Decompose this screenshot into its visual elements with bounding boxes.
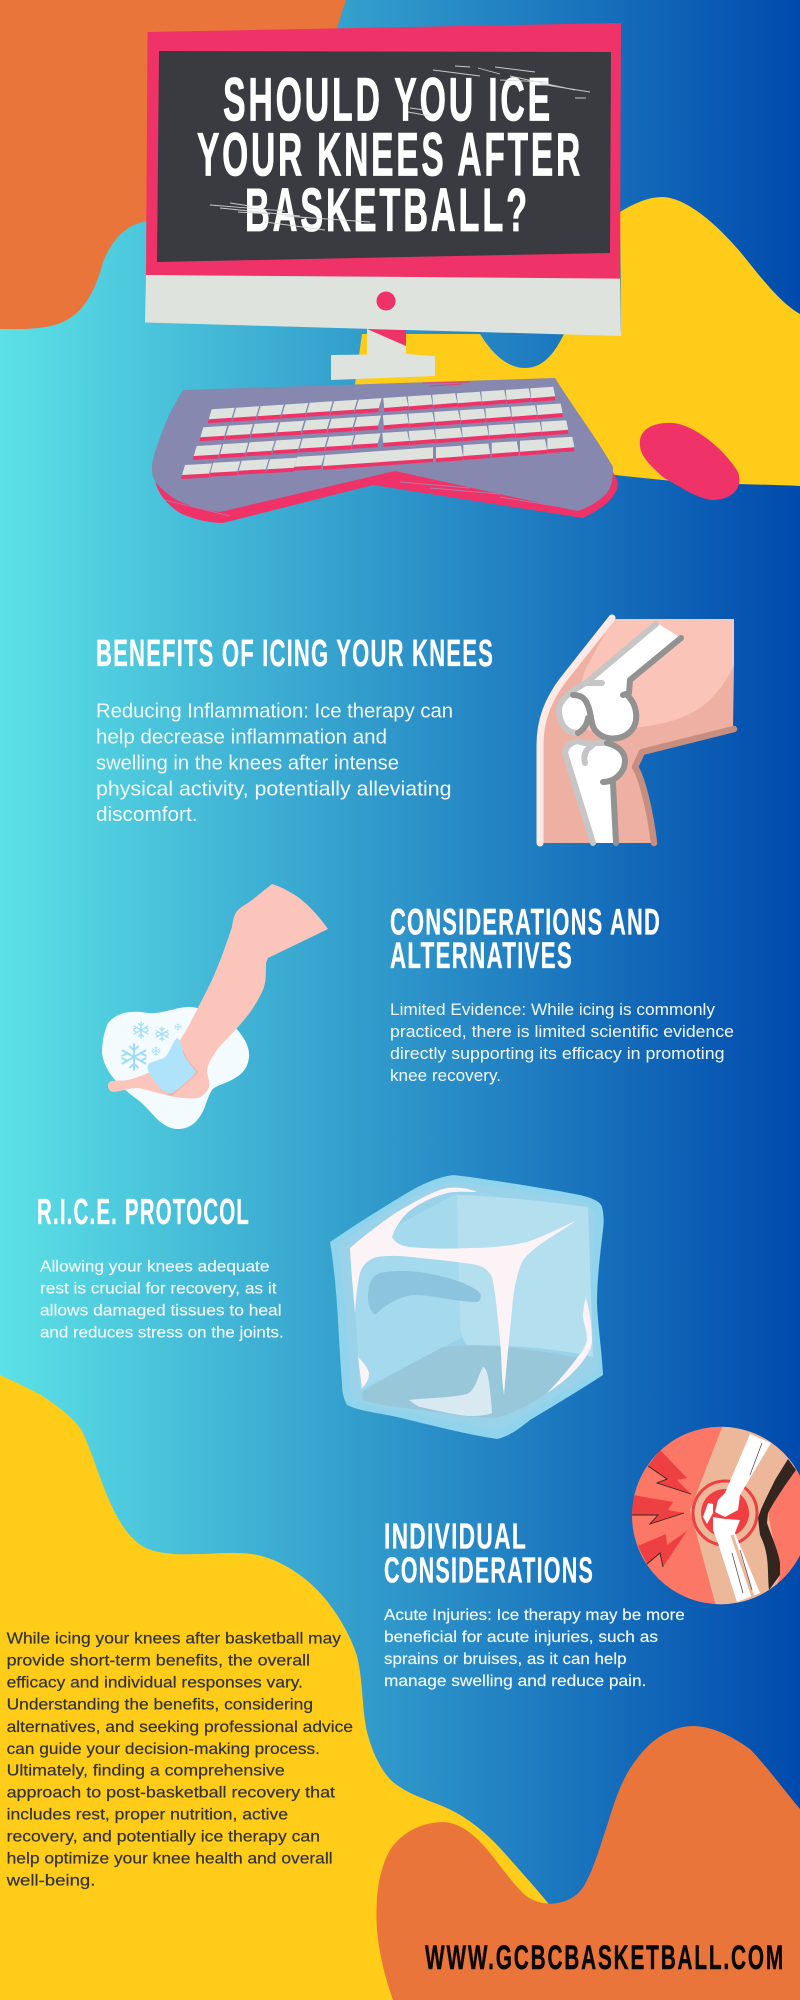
spike outlines (632, 1466, 691, 1567)
blob: yellow lower left (0, 1375, 560, 2000)
keys (181, 387, 574, 479)
conclusion text: approach to post-basketball recovery that (7, 1785, 336, 1802)
title scratches (210, 66, 590, 230)
snow patch (102, 1007, 249, 1129)
body: benefits: swelling in the knees after intense (96, 752, 399, 774)
body: rice: Allowing your knees adequate (40, 1259, 270, 1276)
pain rings (693, 1481, 757, 1545)
body: benefits (96, 700, 453, 826)
conclusion text: includes rest, proper nutrition, active (7, 1807, 288, 1824)
bone detail lines (732, 1443, 762, 1593)
cube outer (330, 1175, 604, 1439)
cube left shade (368, 1271, 481, 1315)
heading: individual: CONSIDERATIONS (384, 1550, 594, 1590)
heading: individual (384, 1516, 594, 1590)
ice pack shadow (160, 1050, 199, 1096)
pain spike bottom (638, 1531, 687, 1567)
section: benefits of icing (96, 633, 494, 826)
tibia (567, 742, 625, 843)
title: SHOULD YOU ICE (223, 66, 553, 134)
blob: pink mouse (640, 423, 739, 500)
monitor frame (146, 23, 621, 279)
heading: rice: R.I.C.E. PROTOCOL (37, 1191, 250, 1232)
skin band (690, 1425, 796, 1606)
femur (559, 623, 681, 738)
pain spike middle (632, 1495, 684, 1524)
body: considerations: Limited Evidence: While icing is commonly (390, 1000, 715, 1019)
section: rice protocol (37, 1191, 284, 1342)
body: considerations: practiced, there is limited scientific evidence (390, 1022, 734, 1041)
conclusion text (5, 1631, 353, 1890)
patella bone (703, 1503, 713, 1524)
blob: orange top left (0, 0, 346, 329)
title (197, 66, 583, 244)
snowflakes (122, 1022, 181, 1070)
cube left highlight (358, 1357, 369, 1388)
knee flesh lower (538, 619, 734, 843)
conclusion text: help optimize your knee health and overall (7, 1850, 333, 1868)
blob: orange bottom right (376, 1726, 800, 2000)
cube left face (352, 1193, 463, 1390)
cube right highlight (547, 1298, 592, 1393)
body: rice: and reduces stress on the joints. (40, 1324, 284, 1342)
heading: considerations (390, 902, 661, 976)
tibia outline dark (603, 743, 625, 843)
femur outline dark (573, 638, 681, 739)
cube back face (457, 1195, 593, 1357)
body: rice: allows damaged tissues to heal (40, 1302, 282, 1320)
tibia bone (713, 1517, 760, 1602)
body: rice (40, 1259, 284, 1342)
leg outline (758, 1459, 796, 1590)
underside scratches (165, 470, 580, 516)
keyboard body (152, 378, 613, 512)
body: individual: sprains or bruises, as it can help (384, 1651, 627, 1668)
knee flesh upper (570, 619, 734, 735)
body: benefits: Reducing Inflammation: Ice therapy can (96, 700, 453, 722)
pain background (630, 1425, 800, 1607)
knee skin highlight (540, 618, 612, 843)
body: considerations: directly supporting its efficacy in promoting (390, 1044, 724, 1063)
monitor base bezel (145, 275, 621, 336)
conclusion text: provide short-term benefits, the overall (7, 1652, 310, 1670)
power button (376, 292, 396, 310)
monitor stand (331, 325, 435, 380)
keyboard top scratches (423, 382, 470, 386)
heading: benefits: BENEFITS OF ICING YOUR KNEES (96, 633, 494, 675)
section: considerations and alternatives (390, 902, 734, 1085)
section: individual considerations (384, 1516, 685, 1690)
keyboard underside (155, 465, 618, 523)
femur outline light (559, 624, 656, 733)
pain spike top (648, 1450, 691, 1494)
body: individual: Acute Injuries: Ice therapy may be more (384, 1607, 685, 1624)
body: individual: beneficial for acute injuries, such as (384, 1629, 658, 1646)
knee shadow line (635, 729, 734, 843)
blob: yellow top right (355, 197, 800, 486)
femur bone (715, 1434, 771, 1517)
conclusion text: recovery, and potentially ice therapy can (7, 1829, 320, 1846)
body: benefits: physical activity, potentially alleviating (96, 778, 451, 800)
body: rice: rest is crucial for recovery, as it (40, 1281, 277, 1298)
illustration: knee pain circle (630, 1425, 800, 1607)
body: considerations (390, 1000, 734, 1085)
body: individual (384, 1607, 685, 1690)
illustration: keyboard (152, 378, 618, 523)
body: benefits: help decrease inflammation and (96, 727, 387, 749)
conclusion text: can guide your decision-making process. (7, 1741, 320, 1758)
leg (108, 884, 328, 1098)
body: individual: manage swelling and reduce pain. (384, 1673, 646, 1690)
ice pack (148, 1038, 196, 1093)
cube main highlight (350, 1188, 577, 1395)
illustration: leg with ice pack (102, 884, 328, 1129)
conclusion text: well-being. (5, 1872, 95, 1890)
cube bottom highlight (409, 1367, 492, 1416)
heading: individual: INDIVIDUAL (384, 1516, 527, 1556)
conclusion text: alternatives, and seeking professional advice (7, 1719, 353, 1736)
body: benefits: discomfort. (96, 804, 198, 826)
body: considerations: knee recovery. (390, 1066, 501, 1085)
tibia outline light (565, 741, 607, 843)
illustration: computer monitor (145, 23, 621, 380)
cube inner ring (338, 1182, 598, 1430)
heading: considerations: ALTERNATIVES (390, 935, 573, 976)
conclusion text: While icing your knees after basketball may (7, 1631, 341, 1648)
screen (157, 51, 611, 262)
conclusion text: Ultimately, finding a comprehensive (7, 1763, 285, 1780)
illustration: ice cube (330, 1175, 604, 1439)
illustration: knee joint (538, 618, 734, 843)
cube bottom face (362, 1346, 578, 1418)
conclusion text: Understanding the benefits, considering (7, 1696, 313, 1713)
title: BASKETBALL? (245, 176, 530, 244)
fibula gap (732, 1535, 753, 1597)
conclusion text: efficacy and individual responses vary. (7, 1674, 303, 1692)
